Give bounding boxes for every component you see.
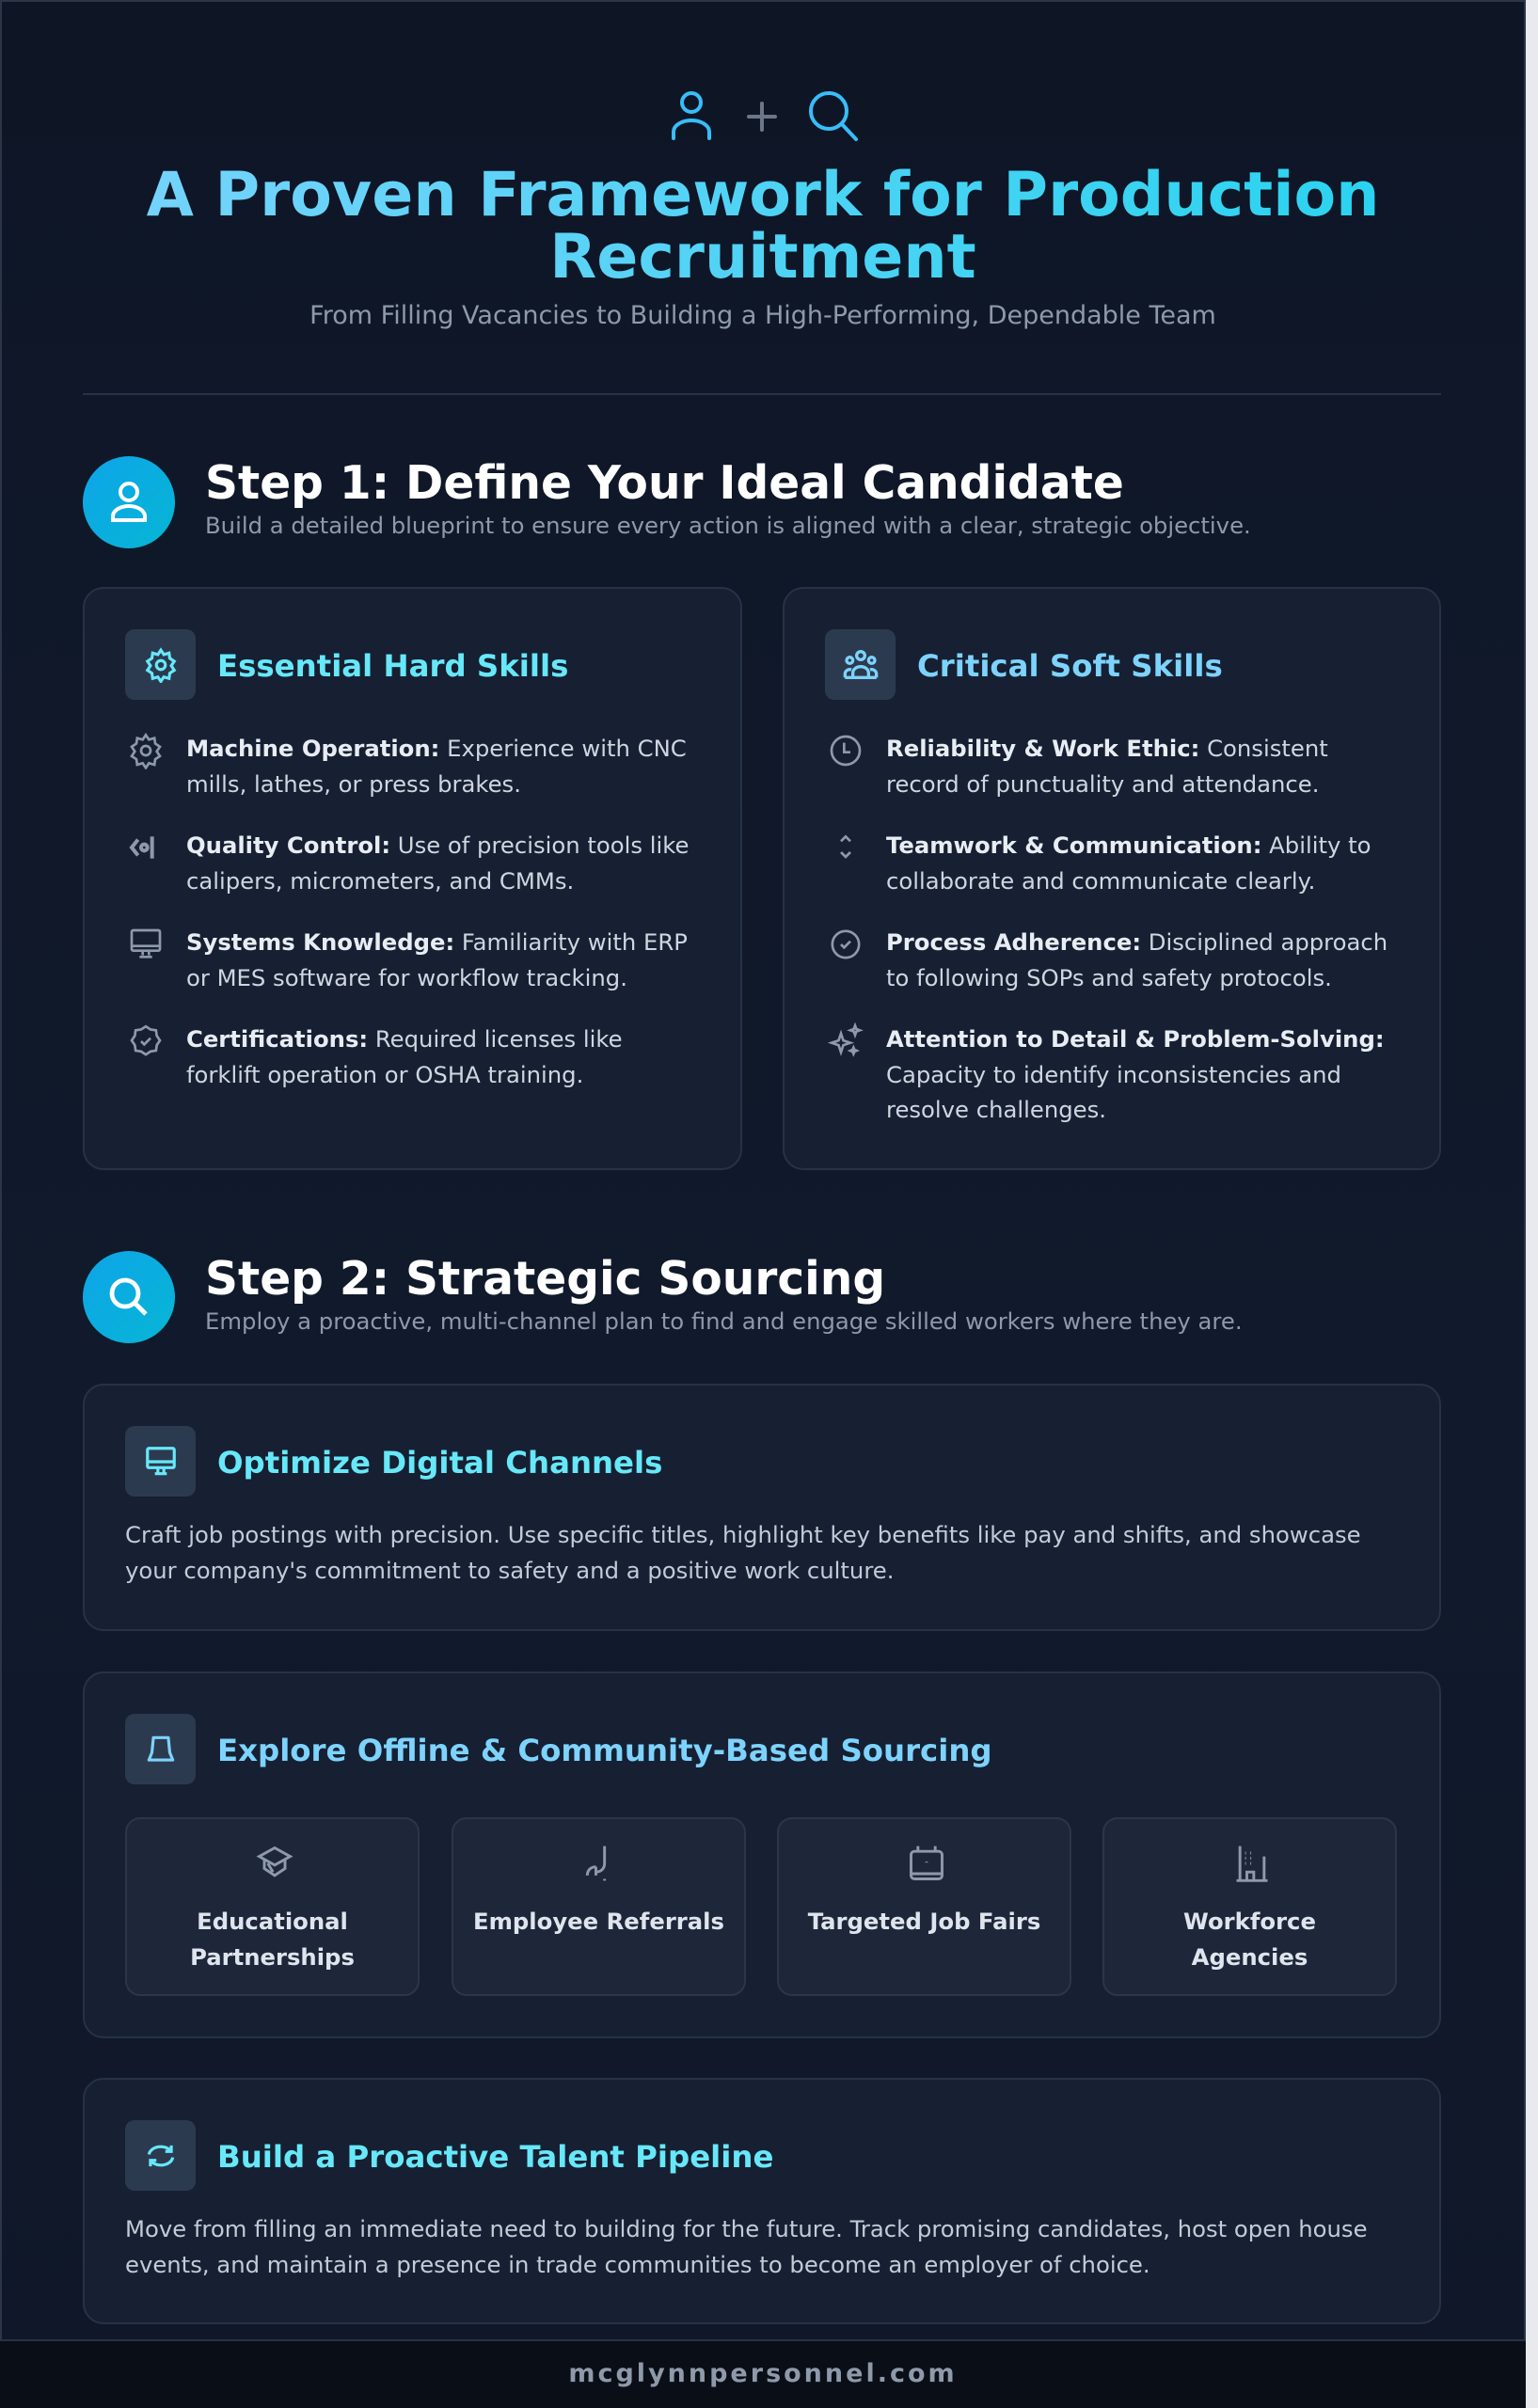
item: teamwork (840, 835, 851, 859)
footer: mcglynnpersonnel.com (568, 2359, 958, 2388)
step 1 subtitle: Build a detailed blueprint to ensure every action is aligned with a clear, strategic objective. (205, 512, 1251, 539)
panel: hard skills (83, 587, 742, 1170)
panel: hard skills: or MES software for workflow tracking. (186, 964, 627, 991)
step 2 heading: Step 2: Strategic Sourcing (205, 1253, 885, 1306)
panel: hard skills: forklift operation or OSHA training. (186, 1061, 583, 1088)
icon: gear (125, 629, 196, 700)
item: systems (130, 929, 162, 958)
card title: Essential Hard Skills (217, 648, 568, 684)
sub: referrals: Employee Referrals (473, 1908, 724, 1935)
item: attention (828, 1022, 864, 1057)
panel: digital channels (83, 1384, 1441, 1631)
step 1 badge (83, 456, 175, 548)
panel: hard skills: mills, lathes, or press brakes. (186, 770, 521, 798)
panel: hard skills: calipers, micrometers, and CMMs. (186, 867, 574, 895)
icon: monitor (125, 1426, 196, 1497)
sub: educational: Educational (197, 1908, 348, 1935)
subtitle: From Filling Vacancies to Building a High-Performing, Dependable Team (309, 301, 1216, 330)
title: A Proven Framework for Production (147, 160, 1379, 230)
body text: Move from filling an immediate need to building for the future. Track promising candidates, host open house (125, 2215, 1368, 2242)
panel: soft skills: Teamwork & Communication: Ability to (886, 832, 1372, 859)
card title: Build a Proactive Talent Pipeline (217, 2139, 773, 2175)
card title: Optimize Digital Channels (217, 1445, 662, 1481)
icon: refresh (125, 2120, 196, 2191)
panel: soft skills: collaborate and communicate clearly. (886, 867, 1315, 895)
sub: job fairs (777, 1817, 1071, 1996)
sub: educational: Partnerships (190, 1943, 355, 1971)
item: process (832, 929, 860, 959)
item: reliability (830, 736, 862, 766)
step 2 subtitle: Employ a proactive, multi-channel plan to find and engage skilled workers where they are. (205, 1307, 1243, 1335)
panel: hard skills: Systems Knowledge: Familiarity with ERP (186, 928, 688, 956)
panel: offline sourcing (83, 1671, 1441, 2038)
step 1 heading: Step 1: Define Your Ideal Candidate (205, 457, 1124, 510)
title (0, 165, 1526, 289)
sub: agencies: Agencies (1192, 1943, 1308, 1971)
panel: soft skills: to following SOPs and safety protocols. (886, 964, 1332, 991)
panel: soft skills: Reliability & Work Ethic: Consistent (886, 735, 1328, 762)
body text (125, 1521, 1361, 1584)
body text: Craft job postings with precision. Use specific titles, highlight key benefits like pay and shifts, and showcase (125, 1521, 1361, 1548)
sub: educational (125, 1817, 420, 1996)
item: quality (130, 836, 154, 859)
sub: agencies (1102, 1817, 1397, 1996)
panel: soft skills: Process Adherence: Disciplined approach (886, 928, 1387, 956)
header icons (672, 91, 858, 141)
footer (0, 2339, 1526, 2408)
panel: soft skills: Attention to Detail & Problem-Solving: (886, 1025, 1385, 1053)
card title: Critical Soft Skills (917, 648, 1223, 684)
title: Recruitment (549, 222, 976, 293)
icon: team (825, 629, 896, 700)
panel: soft skills: Capacity to identify inconsistencies and (886, 1061, 1341, 1088)
panel: hard skills: Quality Control: Use of precision tools like (186, 832, 689, 859)
step 2 badge (83, 1251, 175, 1343)
panel: soft skills: record of punctuality and attendance. (886, 770, 1319, 798)
sub: job fairs: Targeted Job Fairs (808, 1908, 1040, 1935)
item: certifications (130, 1025, 162, 1056)
sub: referrals (452, 1817, 746, 1996)
panel: hard skills: Certifications: Required licenses like (186, 1025, 623, 1053)
body text: your company's commitment to safety and a positive work culture. (125, 1557, 894, 1584)
icon: bell (125, 1714, 196, 1784)
panel: hard skills: Machine Operation: Experience with CNC (186, 735, 687, 762)
panel: soft skills: resolve challenges. (886, 1096, 1106, 1123)
panel: talent pipeline (83, 2078, 1441, 2324)
body text: events, and maintain a presence in trade communities to become an employer of choice. (125, 2251, 1150, 2278)
item: machine (130, 733, 162, 769)
panel: soft skills (783, 587, 1441, 1170)
card title: Explore Offline & Community-Based Sourcing (217, 1733, 992, 1768)
body text (125, 2215, 1368, 2278)
sub: agencies: Workforce (1183, 1908, 1316, 1935)
